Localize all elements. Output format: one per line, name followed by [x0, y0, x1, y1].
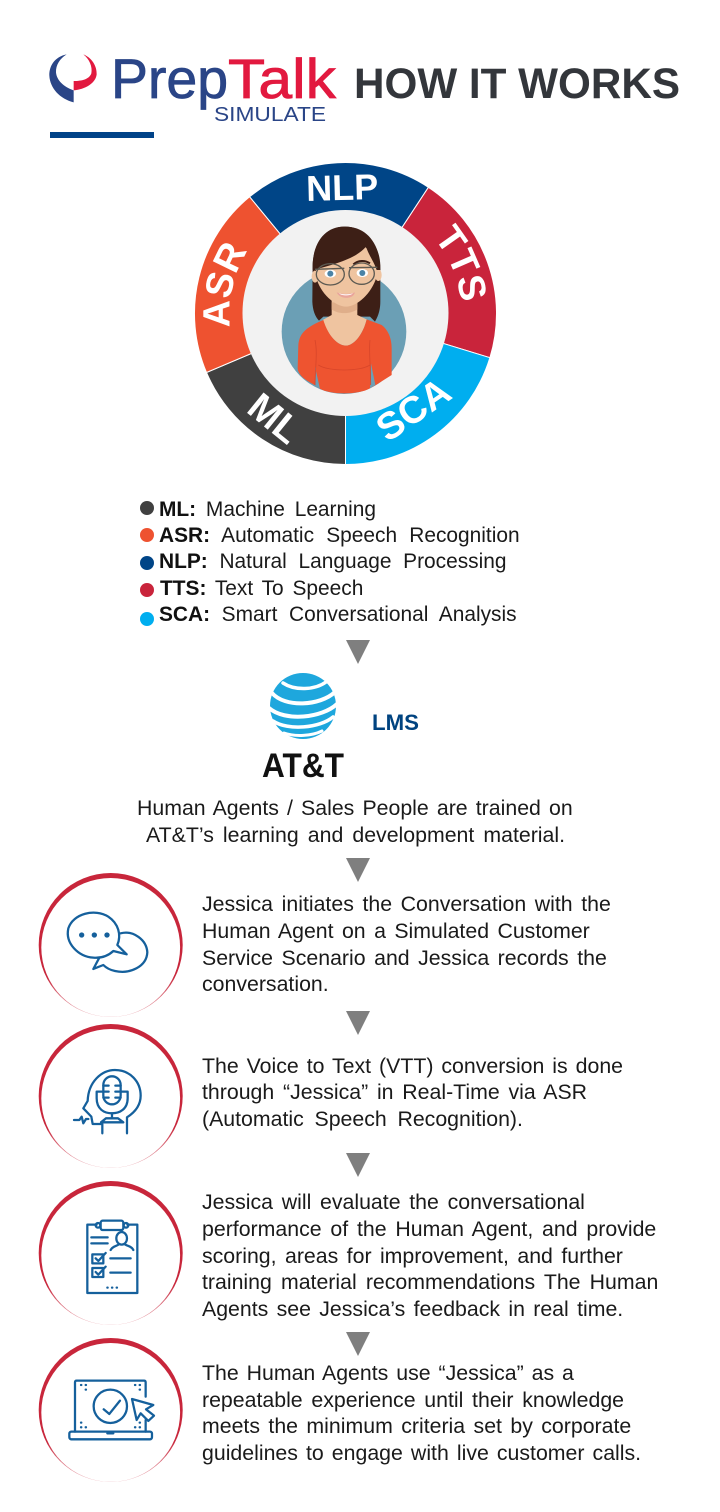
- legend item: SCA: SCA: Smart Conversational Analysis: [159, 603, 517, 626]
- arrow 3: [346, 1011, 370, 1035]
- step 3 text: [202, 1190, 658, 1321]
- icon: PrepTalk logo mark: [49, 54, 97, 102]
- segment: ASR: [194, 196, 280, 373]
- step 3 text: Jessica will evaluate the conversational: [202, 1190, 585, 1214]
- step 4 text: The Human Agents use “Jessica” as a: [202, 1361, 574, 1385]
- arrow 2: [346, 858, 370, 882]
- segment: ML: [206, 314, 346, 464]
- title: HOW IT WORKS: [354, 60, 680, 108]
- segment: TTS: TTS: [439, 222, 486, 300]
- step 1: [39, 873, 611, 1017]
- AT&T LMS block: [262, 673, 419, 785]
- LMS label: LMS: [372, 710, 419, 735]
- legend item: TTS: TTS: Text To Speech: [160, 577, 363, 600]
- step 3 ring: [39, 1181, 183, 1325]
- step 2 text: (Automatic Speech Recognition).: [202, 1107, 523, 1131]
- segment: NLP: NLP: [306, 166, 379, 209]
- step 3: [39, 1181, 658, 1325]
- training description: [137, 796, 573, 847]
- legend item: NLP: NLP: Natural Language Processing: [159, 550, 506, 573]
- arrow 5: [346, 1332, 370, 1356]
- step 1 text: Service Scenario and Jessica records the: [202, 946, 607, 970]
- segment: TTS: [402, 188, 496, 357]
- step 3 text: Agents see Jessica’s feedback in real time.: [202, 1297, 623, 1321]
- header: [49, 47, 680, 138]
- arrow 4: [346, 1153, 370, 1177]
- logo wordmark: [111, 47, 337, 126]
- step 4 text: guidelines to engage with live customer calls.: [202, 1441, 641, 1465]
- training description: Human Agents / Sales People are trained on: [137, 796, 573, 820]
- icon: Jessica avatar: [282, 227, 406, 394]
- inner disk: [242, 210, 448, 416]
- title underline: [50, 132, 154, 138]
- icon: head with microphone: [74, 1070, 141, 1133]
- step 4 ring: [39, 1338, 183, 1482]
- segment: SCA: [346, 314, 490, 464]
- step 4 text: [202, 1361, 641, 1465]
- step 3 text: training material recommendations The Human: [202, 1270, 658, 1294]
- step 1 text: [202, 892, 611, 996]
- step 2 text: through “Jessica” in Real-Time via ASR: [202, 1080, 587, 1104]
- step 2: [39, 1024, 623, 1168]
- segment: SCA: SCA: [369, 370, 459, 450]
- legend item: ML: ML: Machine Learning: [159, 498, 376, 521]
- segment: ASR: ASR: [203, 243, 247, 326]
- step 1 text: Jessica initiates the Conversation with the: [202, 892, 611, 916]
- step 2 text: The Voice to Text (VTT) conversion is done: [202, 1054, 623, 1078]
- step 4 text: repeatable experience until their knowledge: [202, 1388, 624, 1412]
- step 1 text: conversation.: [202, 972, 329, 996]
- arrow 1: [346, 640, 370, 664]
- step 2 ring: [39, 1024, 183, 1168]
- step 3 text: performance of the Human Agent, and provide: [202, 1217, 656, 1241]
- segment: ML: ML: [240, 386, 309, 453]
- logo wordmark: SIMULATE: [214, 104, 326, 126]
- step 4: [39, 1338, 641, 1482]
- step 1 text: Human Agent on a Simulated Customer: [202, 919, 590, 943]
- icon: AT&T globe: [269, 673, 337, 739]
- icon: clipboard checklist: [87, 1221, 137, 1293]
- segment: NLP: [250, 162, 428, 314]
- step 3 text: scoring, areas for improvement, and further: [202, 1244, 623, 1268]
- legend: [140, 498, 520, 626]
- icon: laptop with check and cursor: [69, 1381, 154, 1439]
- technology ring diagram: [194, 163, 496, 464]
- logo wordmark: Prep: [111, 47, 228, 110]
- step 2 text: [202, 1054, 623, 1131]
- step 1 ring: [39, 873, 183, 1017]
- AT&T wordmark: AT&T: [262, 747, 344, 785]
- icon: chat bubbles: [68, 913, 147, 972]
- training description: AT&T’s learning and development material.: [146, 823, 565, 847]
- logo wordmark: Talk: [228, 47, 337, 110]
- legend item: ASR: ASR: Automatic Speech Recognition: [159, 524, 520, 547]
- step 4 text: meets the minimum criteria set by corporate: [202, 1414, 631, 1438]
